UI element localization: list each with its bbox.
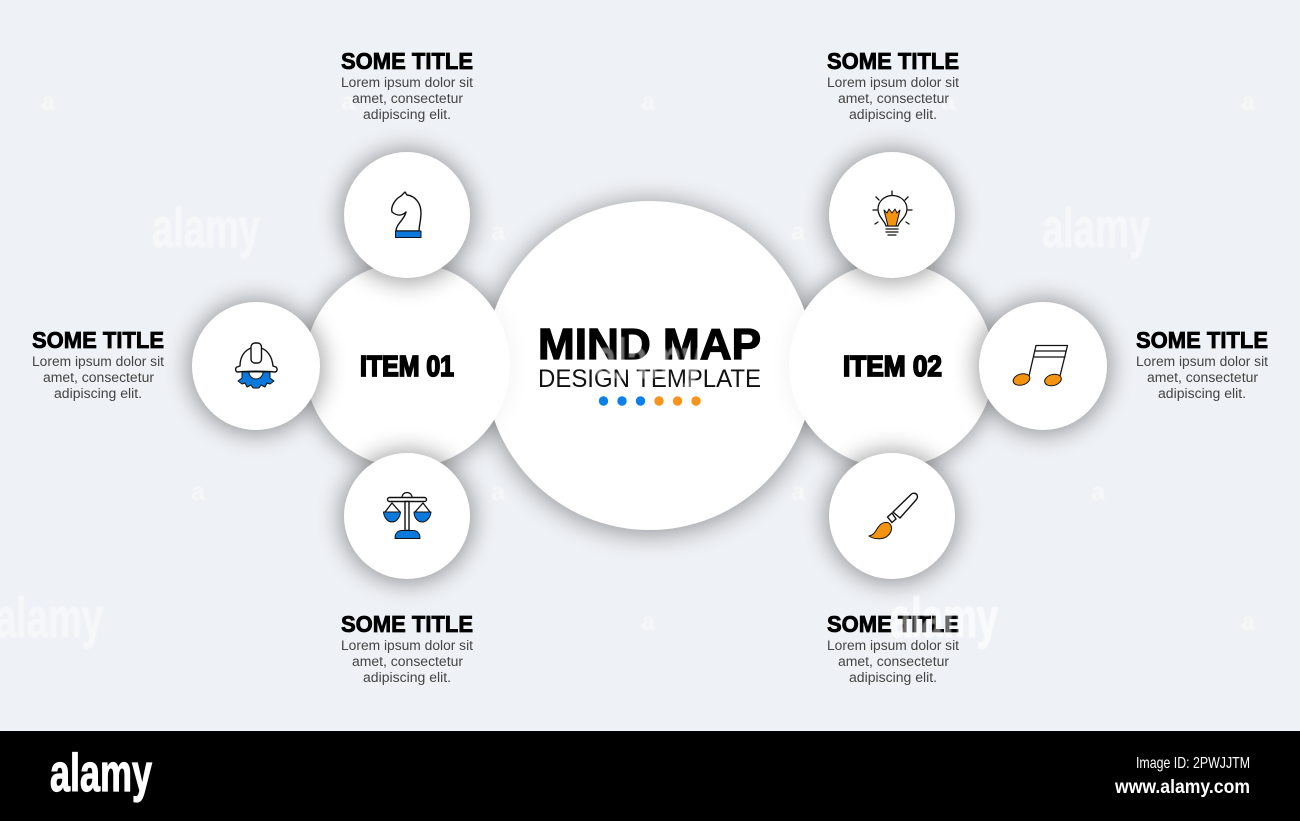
text block: right: Lorem ipsum dolor sit bbox=[1136, 354, 1268, 369]
footer band bbox=[0, 731, 1300, 821]
text block: top right: SOME TITLE bbox=[827, 48, 959, 74]
text block: bottom left bbox=[341, 611, 473, 685]
text block: bottom right: SOME TITLE bbox=[827, 611, 959, 637]
text block: top right: Lorem ipsum dolor sit bbox=[827, 75, 959, 90]
website: www.alamy.com bbox=[1114, 777, 1250, 798]
text block: top right bbox=[827, 48, 959, 122]
text block: bottom left: Lorem ipsum dolor sit bbox=[341, 638, 473, 653]
label: item 01: ITEM 01 bbox=[360, 351, 454, 383]
node: left bbox=[189, 300, 323, 434]
text block: left bbox=[32, 327, 164, 401]
background watermarks: a bbox=[1241, 88, 1256, 116]
center title: MIND MAP bbox=[538, 320, 761, 369]
item 01 circle bbox=[305, 262, 510, 468]
background watermarks: a bbox=[191, 478, 206, 506]
background watermarks: a bbox=[791, 218, 806, 246]
node: top right bbox=[826, 150, 958, 282]
central circle bbox=[485, 201, 814, 530]
text block: bottom right: Lorem ipsum dolor sit bbox=[827, 638, 959, 653]
background watermarks: a bbox=[941, 88, 956, 116]
center title: DESIGN TEMPLATE bbox=[538, 365, 761, 393]
background watermarks: a bbox=[1241, 608, 1256, 636]
background watermarks: a bbox=[41, 88, 56, 116]
text block: top left bbox=[341, 48, 473, 122]
background watermarks: a bbox=[491, 478, 506, 506]
background watermarks: a bbox=[1091, 478, 1106, 506]
text block: bottom right: adipiscing elit. bbox=[849, 670, 937, 685]
background watermarks: a bbox=[491, 218, 506, 246]
background watermarks: a bbox=[791, 478, 806, 506]
text block: left: amet, consectetur bbox=[43, 370, 155, 385]
icon: music notes bbox=[1012, 346, 1068, 388]
background watermarks: alamy bbox=[890, 586, 998, 649]
text block: top left: Lorem ipsum dolor sit bbox=[341, 75, 473, 90]
node: bottom left bbox=[341, 451, 473, 583]
text block: top left: adipiscing elit. bbox=[363, 107, 451, 122]
text block: top right: adipiscing elit. bbox=[849, 107, 937, 122]
dots row bbox=[599, 396, 701, 406]
node: top left bbox=[341, 150, 473, 282]
text block: right: adipiscing elit. bbox=[1158, 386, 1246, 401]
label: item 02: ITEM 02 bbox=[843, 351, 942, 383]
text block: top left: amet, consectetur bbox=[352, 91, 464, 106]
background watermarks: a bbox=[641, 608, 656, 636]
text block: bottom left: SOME TITLE bbox=[341, 611, 473, 637]
text block: right: amet, consectetur bbox=[1147, 370, 1259, 385]
background watermarks: alamy bbox=[152, 196, 260, 259]
item 02 circle bbox=[789, 262, 994, 468]
text block: left: Lorem ipsum dolor sit bbox=[32, 354, 164, 369]
text block: bottom right bbox=[827, 611, 959, 685]
text block: top left: SOME TITLE bbox=[341, 48, 473, 74]
icon: chess knight bbox=[392, 192, 421, 238]
watermark overlays on text: alamy bbox=[890, 586, 998, 649]
watermark overlays on text: alamy bbox=[595, 327, 703, 390]
text block: bottom left: amet, consectetur bbox=[352, 654, 464, 669]
watermark overlays on text bbox=[595, 327, 998, 649]
icon: helmet with gear bbox=[236, 343, 277, 388]
background watermarks bbox=[0, 88, 1256, 649]
center title bbox=[538, 320, 761, 406]
background watermarks: a bbox=[641, 88, 656, 116]
text block: bottom left: adipiscing elit. bbox=[363, 670, 451, 685]
background watermarks: alamy bbox=[1042, 196, 1150, 259]
node: bottom right bbox=[826, 451, 958, 583]
text block: right: SOME TITLE bbox=[1136, 327, 1268, 353]
icon: paint brush bbox=[869, 493, 918, 539]
background watermarks: a bbox=[341, 88, 356, 116]
node: right bbox=[976, 300, 1110, 434]
image id: Image ID: 2PWJJTM bbox=[1136, 755, 1250, 772]
text block: left: SOME TITLE bbox=[32, 327, 164, 353]
text block: top right: amet, consectetur bbox=[838, 91, 950, 106]
icon: light bulb bbox=[873, 191, 912, 235]
text block: left: adipiscing elit. bbox=[54, 386, 142, 401]
footer logo: alamy bbox=[50, 744, 152, 803]
text block: right bbox=[1136, 327, 1268, 401]
text block: bottom right: amet, consectetur bbox=[838, 654, 950, 669]
icon: balance scales bbox=[384, 492, 431, 538]
